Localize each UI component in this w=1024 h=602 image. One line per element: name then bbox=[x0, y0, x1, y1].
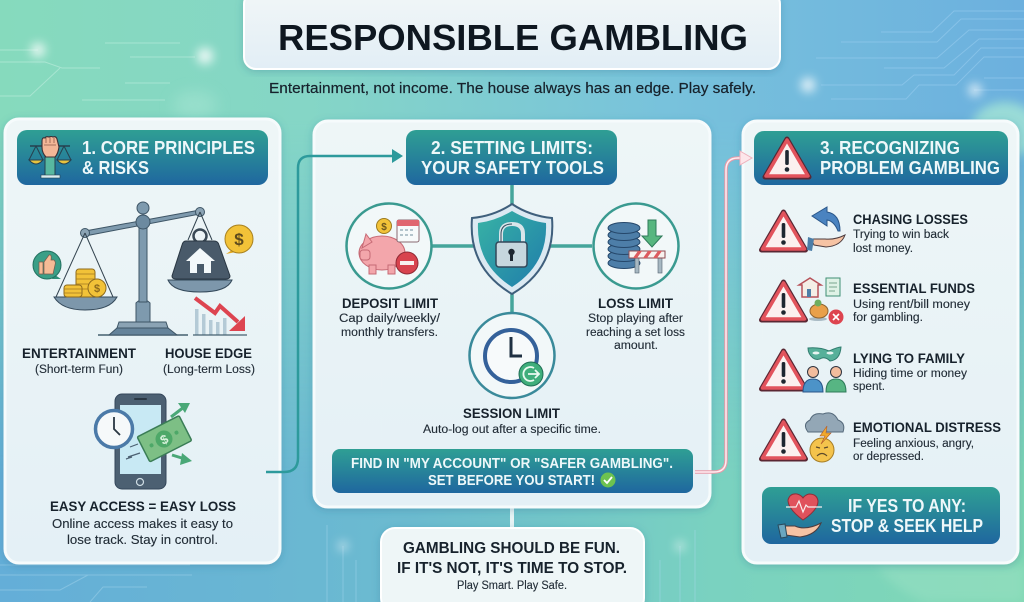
header: recognizing problem gambling bbox=[754, 131, 1008, 185]
text: chasing losses: lost money. bbox=[853, 243, 913, 255]
callout: seek help: STOP & SEEK HELP bbox=[831, 516, 983, 536]
text: emotional distress: Feeling anxious, angry, bbox=[853, 438, 974, 450]
header: core principles bbox=[17, 130, 268, 185]
text: deposit limit: DEPOSIT LIMIT bbox=[342, 295, 438, 311]
right pan with weight and house bbox=[168, 212, 232, 292]
connectors: hub lines bbox=[432, 185, 592, 314]
label: entertainment: ENTERTAINMENT bbox=[22, 345, 136, 361]
text: chasing losses: Trying to win back bbox=[853, 229, 949, 241]
panel: core principles and risks bbox=[5, 119, 280, 563]
deposit limit bbox=[339, 204, 441, 339]
text: essential funds: Using rent/bill money bbox=[853, 299, 970, 311]
panel: setting limits bbox=[314, 121, 710, 507]
arrow: panel 2 to panel 3 bbox=[695, 151, 752, 472]
callout: seek help: IF YES TO ANY: bbox=[848, 496, 966, 516]
text: easy access bbox=[50, 498, 236, 547]
text: essential funds: ESSENTIAL FUNDS bbox=[853, 280, 975, 296]
icon: fist and scales bbox=[29, 136, 71, 178]
icon: warning, house, bills, food bbox=[762, 278, 844, 324]
header: setting limits bbox=[406, 130, 617, 185]
icon: warning, storm cloud, sad face bbox=[762, 413, 844, 462]
icon: heart in hand bbox=[778, 494, 822, 538]
text: loss limit: amount. bbox=[614, 340, 658, 352]
text: emotional distress bbox=[853, 419, 1001, 463]
text: loss limit: LOSS LIMIT bbox=[598, 295, 673, 311]
text: emotional distress: or depressed. bbox=[853, 451, 924, 463]
header: core principles: & RISKS bbox=[82, 158, 149, 178]
item: lying to family bbox=[762, 347, 967, 393]
item: essential funds bbox=[762, 278, 975, 324]
footer panel: IF IT'S NOT, IT'S TIME TO STOP. bbox=[397, 560, 627, 577]
text: loss limit: reaching a set loss bbox=[586, 327, 685, 339]
icon: warning triangle bbox=[765, 139, 809, 177]
text: deposit limit: monthly transfers. bbox=[341, 327, 438, 339]
text: essential funds bbox=[853, 280, 975, 324]
chart icon: balance scale bbox=[33, 202, 253, 335]
text: lying to family: Hiding time or money bbox=[853, 368, 967, 380]
text: easy access: lose track. Stay in control. bbox=[67, 533, 218, 547]
icon: shield with padlock bbox=[472, 204, 552, 294]
header: recognizing problem gambling: PROBLEM GAMBLING bbox=[820, 158, 1000, 178]
subtitle: Entertainment, not income. The house always has an edge. Play safely. bbox=[269, 81, 756, 97]
arrow: panel 1 to panel 2 bbox=[266, 149, 403, 472]
session limit bbox=[423, 313, 601, 436]
title: RESPONSIBLE GAMBLING bbox=[278, 17, 748, 58]
text: lying to family bbox=[853, 350, 967, 393]
icon: warning, mask, people bbox=[762, 347, 846, 392]
icon: dollar bubble bbox=[225, 225, 253, 254]
header: setting limits: YOUR SAFETY TOOLS bbox=[421, 158, 604, 178]
icon: clock with logout bbox=[470, 313, 554, 398]
icon: chips and barrier bbox=[594, 204, 678, 288]
label: entertainment: (Short-term Fun) bbox=[35, 364, 123, 376]
icon: phone with clock and cash bbox=[96, 394, 192, 489]
text: lying to family: spent. bbox=[853, 381, 885, 393]
loss limit bbox=[586, 204, 685, 352]
footer panel bbox=[381, 528, 644, 602]
text: easy access: EASY ACCESS = EASY LOSS bbox=[50, 498, 236, 514]
text: essential funds: for gambling. bbox=[853, 312, 923, 324]
callout: seek help bbox=[762, 487, 1000, 544]
icon: piggy bank: $ bbox=[381, 222, 387, 233]
icon: phone with clock and cash: $ bbox=[158, 431, 172, 448]
header: recognizing problem gambling: 3. RECOGNIZING bbox=[820, 138, 960, 158]
text: deposit limit bbox=[339, 295, 441, 339]
footer message: GAMBLING SHOULD BE FUN. bbox=[403, 540, 620, 557]
callout: where to find limits: FIND IN "MY ACCOUNT" OR "SAFER GAMBLING". bbox=[351, 456, 673, 472]
text: loss limit: Stop playing after bbox=[588, 313, 683, 325]
label: house edge: HOUSE EDGE bbox=[165, 345, 252, 361]
item: emotional distress bbox=[762, 413, 1001, 463]
label: entertainment bbox=[22, 345, 136, 376]
text: deposit limit: Cap daily/weekly/ bbox=[339, 313, 441, 325]
icon: warning and hand bbox=[762, 207, 845, 251]
text: lying to family: LYING TO FAMILY bbox=[853, 350, 966, 366]
connector: panel 2 to footer bbox=[510, 505, 514, 530]
title panel bbox=[244, 0, 780, 69]
text: session limit: SESSION LIMIT bbox=[463, 405, 560, 421]
text: easy access: Online access makes it easy to bbox=[52, 517, 233, 531]
header: setting limits: 2. SETTING LIMITS: bbox=[431, 138, 593, 158]
text: chasing losses: CHASING LOSSES bbox=[853, 211, 968, 227]
icon: falling red arrow bbox=[193, 298, 247, 335]
text: session limit: Auto-log out after a specific time. bbox=[423, 424, 601, 436]
icon: dollar bubble: $ bbox=[234, 230, 244, 249]
left pan with coins: $ bbox=[94, 283, 100, 295]
text: session limit bbox=[423, 405, 601, 436]
text: loss limit bbox=[586, 295, 685, 352]
callout: where to find limits: SET BEFORE YOU START! bbox=[428, 473, 595, 489]
label: house edge: (Long-term Loss) bbox=[163, 364, 255, 376]
item: chasing losses bbox=[762, 207, 968, 255]
text: chasing losses bbox=[853, 211, 968, 255]
panel: recognizing problem gambling bbox=[743, 121, 1018, 563]
left pan with coins bbox=[54, 233, 117, 310]
icon: thumbs up bubble bbox=[33, 251, 61, 279]
text: emotional distress: EMOTIONAL DISTRESS bbox=[853, 419, 1001, 435]
callout: where to find limits bbox=[332, 449, 693, 493]
header text: 1. CORE PRINCIPLES bbox=[82, 138, 255, 158]
footer tagline: Play Smart. Play Safe. bbox=[457, 580, 567, 592]
label: house edge bbox=[163, 345, 255, 376]
icon: green check bbox=[600, 472, 616, 488]
